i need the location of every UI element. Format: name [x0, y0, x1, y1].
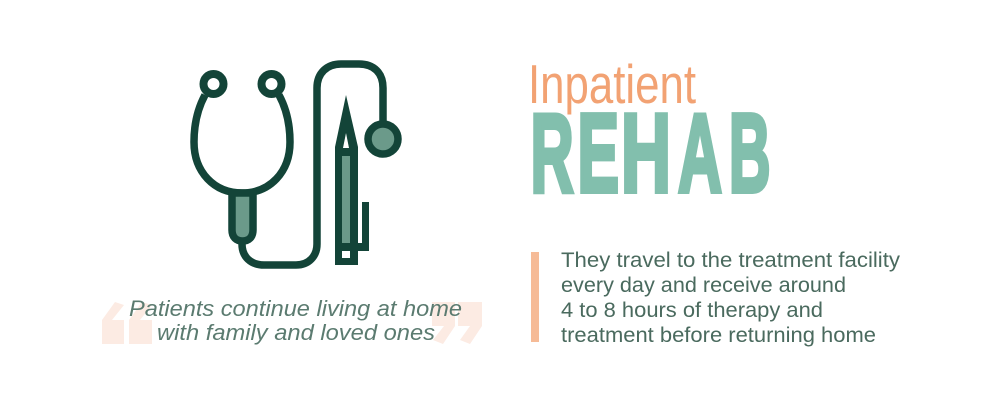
quote text: Patients continue living at home — [129, 296, 462, 321]
description text: every day and receive around — [561, 273, 846, 297]
description text: They travel to the treatment facility — [561, 248, 900, 272]
closing quotation mark — [432, 302, 482, 344]
opening quotation mark — [102, 302, 152, 344]
stethoscope tubing — [194, 64, 383, 265]
pen — [335, 95, 369, 265]
heading: REHAB: E — [578, 92, 619, 216]
accent bar — [531, 252, 539, 342]
description text: 4 to 8 hours of therapy and — [561, 298, 823, 322]
heading: REHAB: B — [729, 92, 770, 216]
icon: stethoscope and pen — [194, 64, 398, 265]
right earpiece — [262, 74, 282, 94]
quote text: with family and loved ones — [157, 320, 435, 345]
stethoscope stem — [232, 193, 253, 241]
left earpiece — [204, 74, 224, 94]
heading: REHAB: A — [678, 92, 722, 216]
heading: REHAB — [531, 92, 770, 216]
chest piece — [368, 124, 398, 154]
heading: REHAB: R — [531, 92, 574, 216]
heading: REHAB: H — [621, 92, 671, 216]
description text — [561, 248, 900, 347]
heading: Inpatient: Inpatient — [528, 53, 696, 115]
description text: treatment before returning home — [561, 323, 876, 347]
quote text — [129, 296, 462, 345]
